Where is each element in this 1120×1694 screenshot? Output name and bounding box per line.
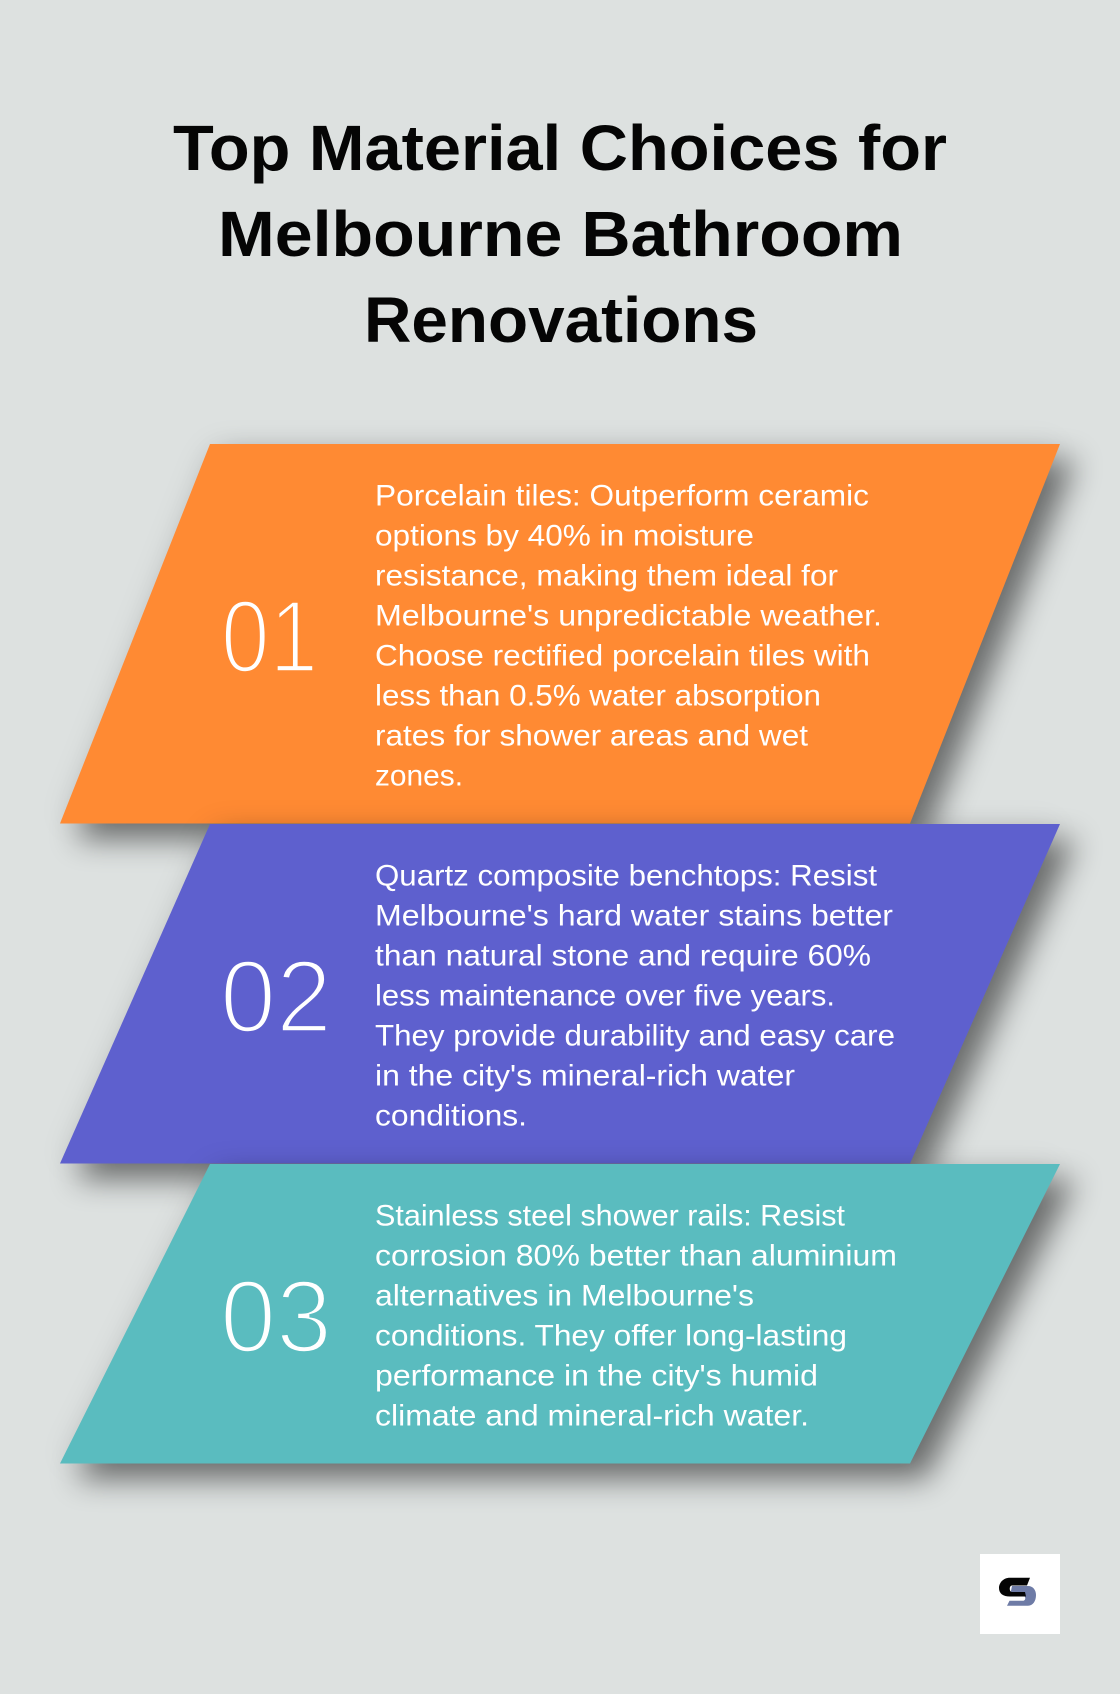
text: porcelain tiles: Porcelain tiles: Outperform ceramic: [375, 480, 869, 512]
text: quartz benchtops: [375, 860, 895, 1132]
title: [173, 112, 947, 356]
text: porcelain tiles: zones.: [375, 760, 463, 792]
text: stainless steel rails: performance in the city's humid: [375, 1360, 818, 1392]
text: stainless steel rails: conditions. They offer long-lasting: [375, 1320, 847, 1352]
text: quartz benchtops: They provide durability and easy care: [375, 1020, 895, 1052]
text: quartz benchtops: Melbourne's hard water stains better: [375, 900, 893, 932]
text: quartz benchtops: than natural stone and require 60%: [375, 940, 871, 972]
text: stainless steel rails: corrosion 80% better than aluminium: [375, 1240, 897, 1272]
title: Renovations: [364, 284, 758, 356]
number 02: 02: [220, 939, 332, 1054]
panel: 02 quartz composite benchtops: [60, 824, 1060, 1164]
panel 3 shape: [60, 1164, 1060, 1464]
title: Melbourne Bathroom: [218, 198, 903, 270]
panel 1 shape: [60, 444, 1060, 824]
number 03: 03: [220, 1259, 332, 1374]
panel 2 shape: [60, 824, 1060, 1164]
logo mark: [999, 1578, 1036, 1606]
text: porcelain tiles: rates for shower areas and wet: [375, 720, 809, 752]
text: porcelain tiles: options by 40% in moisture: [375, 520, 754, 552]
text: stainless steel rails: [375, 1200, 897, 1432]
text: stainless steel rails: climate and mineral-rich water.: [375, 1400, 809, 1432]
text: stainless steel rails: alternatives in Melbourne's: [375, 1280, 754, 1312]
text: quartz benchtops: Quartz composite benchtops: Resist: [375, 860, 878, 892]
text: porcelain tiles: Melbourne's unpredictable weather.: [375, 600, 882, 632]
text: quartz benchtops: conditions.: [375, 1100, 527, 1132]
text: porcelain tiles: [375, 480, 882, 792]
text: porcelain tiles: resistance, making them ideal for: [375, 560, 838, 592]
panel: 03 stainless steel shower rails: [60, 1164, 1060, 1464]
title: Top Material Choices for: [173, 112, 947, 184]
logo badge: [980, 1554, 1060, 1634]
panel: 01 porcelain tiles: [60, 444, 1060, 824]
text: porcelain tiles: less than 0.5% water absorption: [375, 680, 821, 712]
text: quartz benchtops: less maintenance over five years.: [375, 980, 835, 1012]
text: stainless steel rails: Stainless steel shower rails: Resist: [375, 1200, 846, 1232]
text: quartz benchtops: in the city's mineral-rich water: [375, 1060, 795, 1092]
number 01: 01: [221, 579, 318, 694]
text: porcelain tiles: Choose rectified porcelain tiles with: [375, 640, 870, 672]
